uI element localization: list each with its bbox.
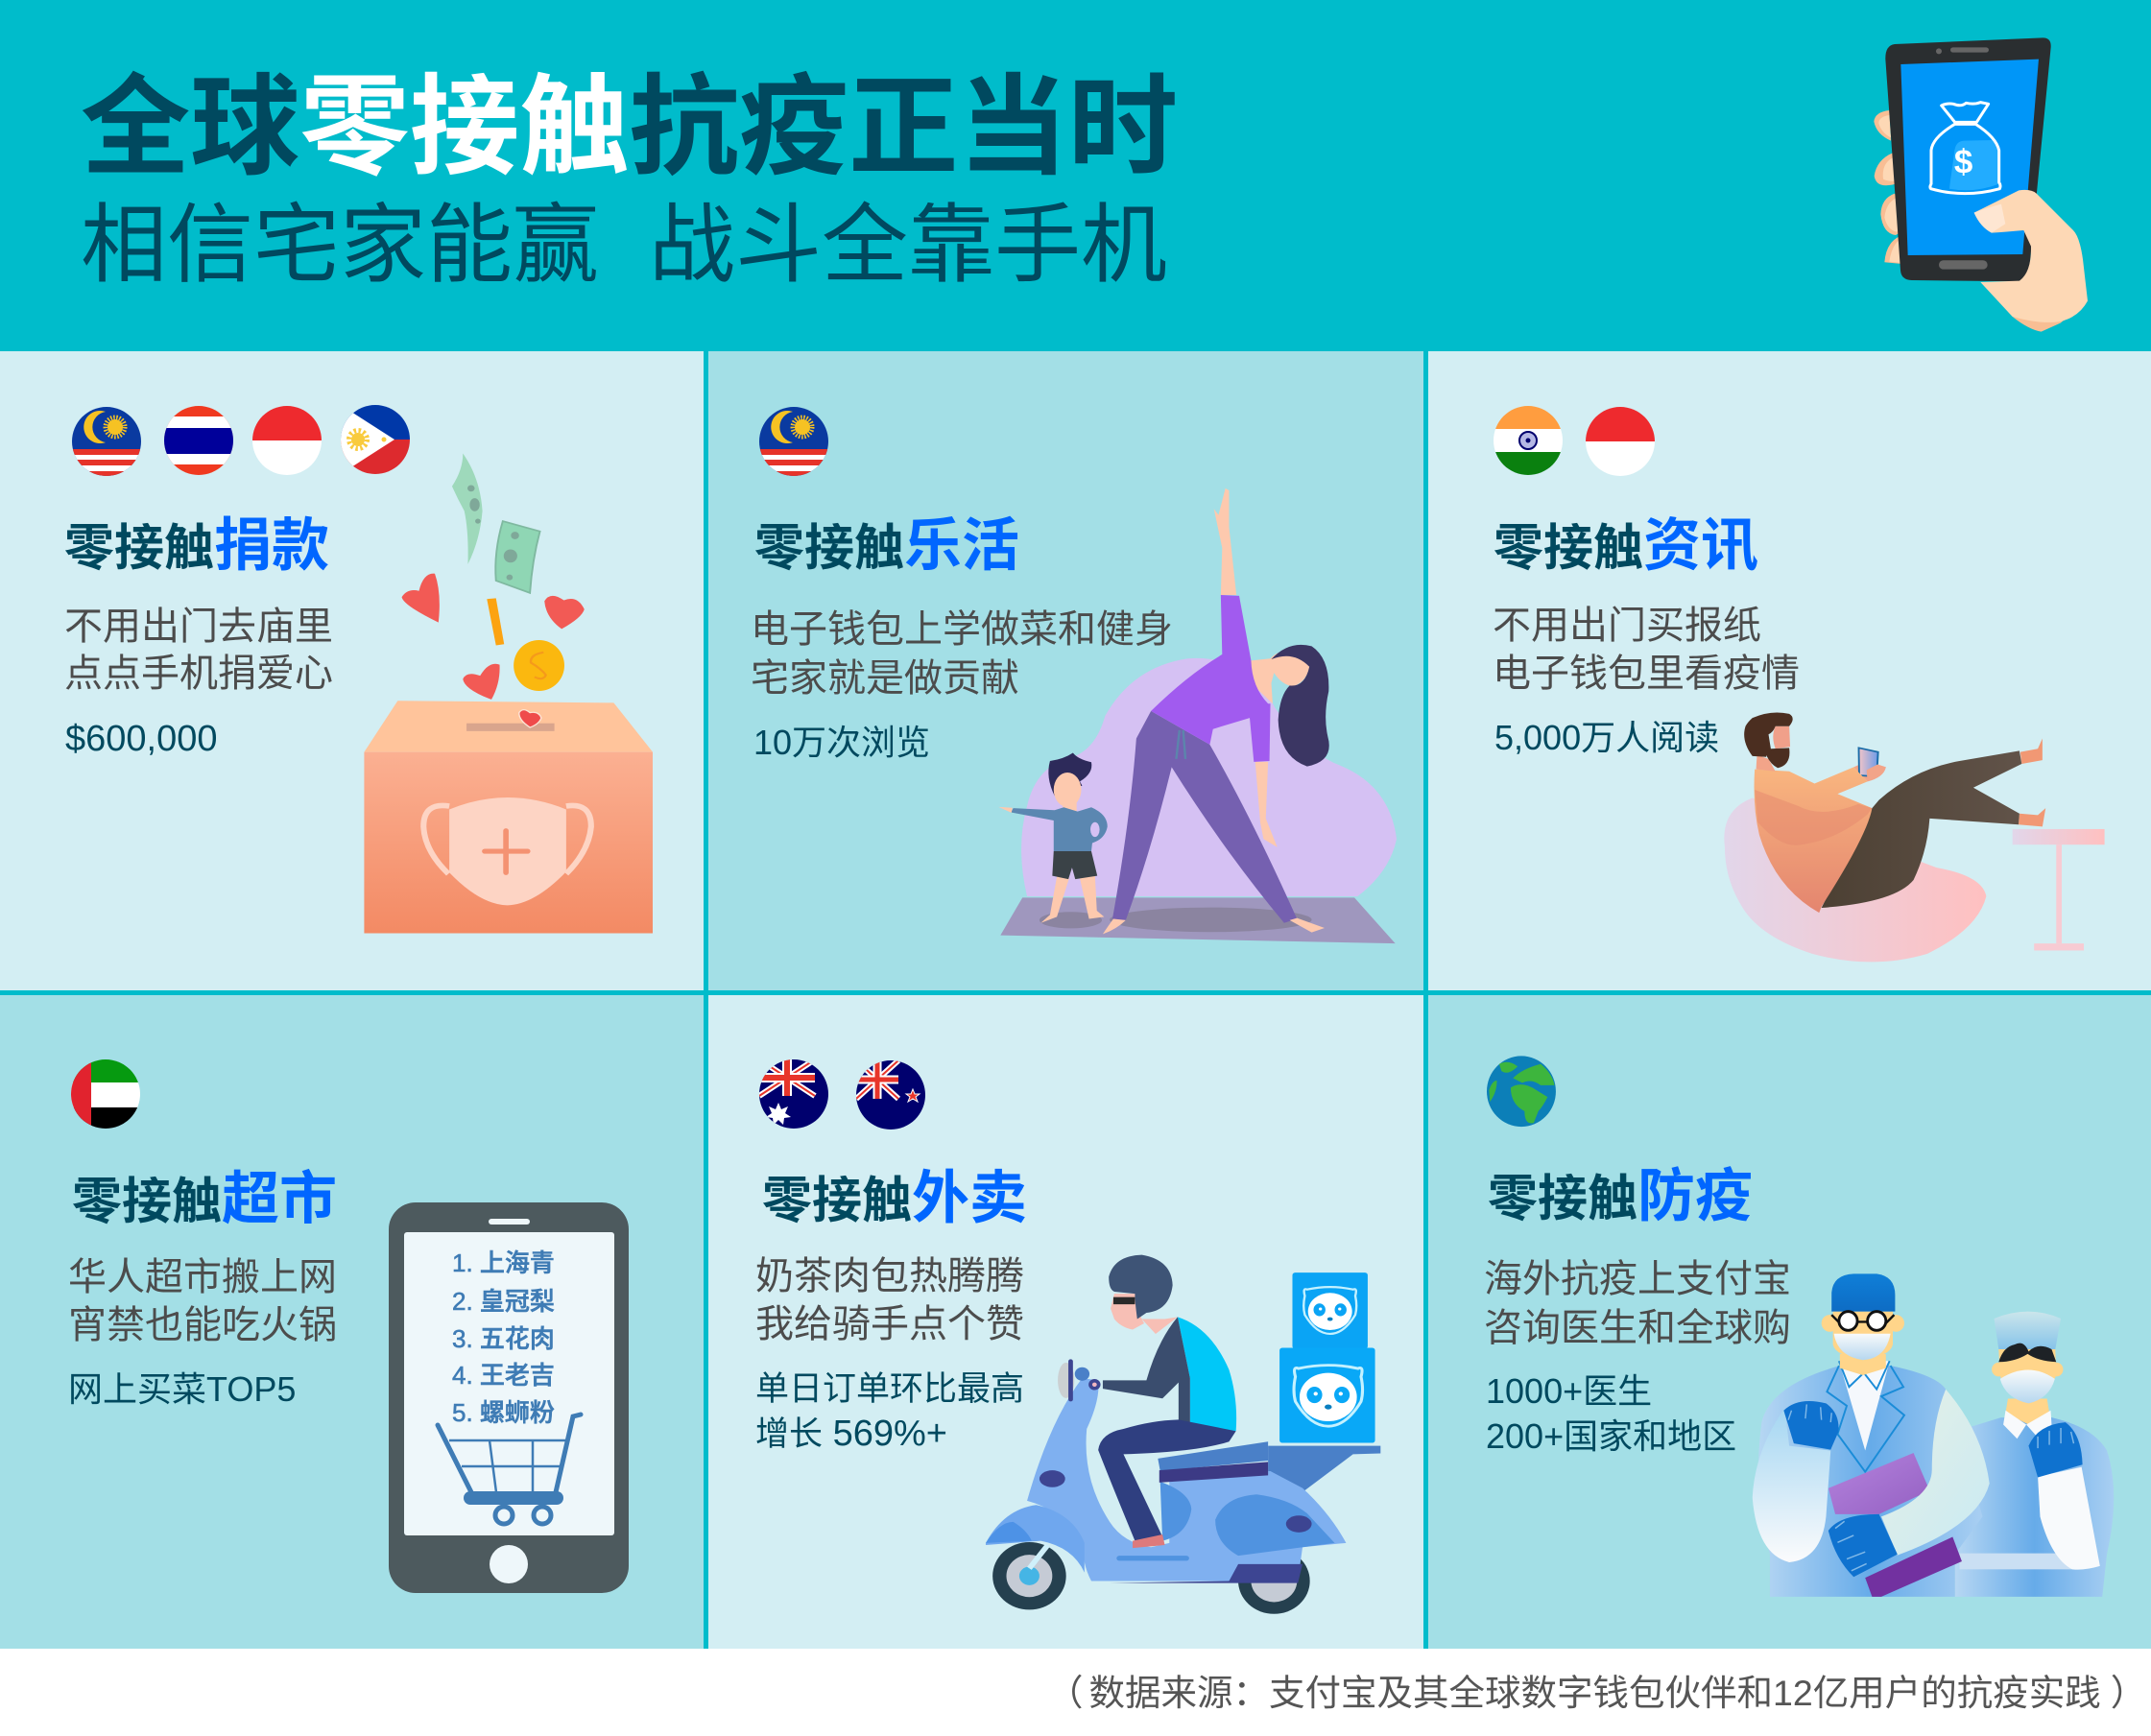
text block: 电子钱包里看疫情 [1493,653,1800,695]
illustration: donation box with mask, money and hearts [364,454,653,933]
text block: 海外抗疫上支付宝 [1484,1258,1791,1300]
statistic: 10万次浏览 [753,723,930,762]
illustration: delivery rider on scooter [986,1255,1380,1614]
text block: 不用出门去庙里 [64,606,333,648]
panel: zero-contact news [1428,351,2151,990]
footer text: （数据来源：支付宝及其全球数字钱包伙伴和12亿用户的抗疫实践 ） [1047,1673,2146,1713]
text block: 华人超市搬上网 [68,1256,337,1298]
statistic: $600,000 [65,719,217,759]
illustration: man reclining with tablet [1724,712,2105,962]
icon: hand holding phone with money bag: $ [1954,144,1972,181]
statistic: 200+国家和地区 [1486,1416,1736,1455]
icon: Malaysia flag [759,407,828,476]
text block: 宅家就是做贡献 [751,657,1019,700]
text block: 宵禁也能吃火锅 [68,1303,337,1345]
text block [1493,605,1800,695]
icon: phone with grocery top 5 list and cart: 2. 皇冠梨 [452,1287,555,1316]
heading: 零接触资讯 [1494,513,1758,578]
text block [68,1256,337,1345]
icon: Indonesia flag [252,406,322,475]
icon: hand holding phone with money bag [1874,37,2089,332]
icon: globe [1487,1056,1556,1127]
panel: zero-contact food delivery [708,995,1423,1649]
panel: zero-contact donation [0,351,704,990]
icon: Philippines flag [341,405,410,474]
statistic [755,1370,1024,1454]
source note [0,1649,2151,1736]
icon: Malaysia flag [72,407,141,476]
heading: 零接触防疫 [1488,1164,1753,1228]
text block [1484,1258,1791,1349]
illustration: mother and child doing yoga [998,488,1397,943]
text block: 不用出门买报纸 [1493,605,1761,647]
illustration: two doctors in masks [1753,1273,2114,1597]
panel: zero-contact leisure [708,351,1423,990]
icon: Thailand flag [164,406,233,475]
statistic: 5,000万人阅读 [1494,718,1719,757]
icon: India flag [1494,406,1563,475]
text block: 咨询医生和全球购 [1484,1307,1791,1349]
statistic: 增长 569%+ [755,1414,947,1454]
icon: phone with grocery top 5 list and cart: 3. 五花肉 [452,1324,555,1353]
text block: 电子钱包上学做菜和健身 [751,608,1173,651]
statistic: 1000+医生 [1486,1371,1652,1411]
text block: 奶茶肉包热腾腾 [755,1255,1024,1297]
panel: zero-contact epidemic prevention [1428,995,2151,1649]
icon: phone with grocery top 5 list and cart: 5. 螺蛳粉 [452,1398,555,1427]
heading: 零接触超市 [72,1167,337,1231]
panel: zero-contact supermarket [0,995,704,1649]
icon: Australia flag [759,1059,828,1129]
icon: phone with grocery top 5 list and cart: 4. 王老吉 [452,1361,555,1390]
subtitle: 相信宅家能赢 战斗全靠手机 [81,198,1167,294]
title: 全球零接触抗疫正当时 [81,67,1178,189]
statistic: 网上买菜TOP5 [68,1369,296,1409]
text block [755,1255,1024,1345]
text block: 点点手机捐爱心 [64,653,333,695]
icon: phone with grocery top 5 list and cart [389,1202,629,1593]
text block [64,606,333,695]
heading: 零接触乐活 [754,513,1019,578]
statistic: 单日订单环比最高 [755,1370,1024,1408]
icon: phone with grocery top 5 list and cart: 1. 上海青 [452,1248,555,1277]
heading: 零接触外卖 [762,1166,1027,1230]
icon: Indonesia flag [1586,407,1655,476]
heading: 零接触捐款 [64,513,329,578]
text block [751,608,1173,700]
statistic [1486,1371,1736,1455]
icon: New Zealand flag [856,1060,925,1130]
text block: 我给骑手点个赞 [755,1303,1024,1345]
icon: UAE flag [71,1059,140,1129]
